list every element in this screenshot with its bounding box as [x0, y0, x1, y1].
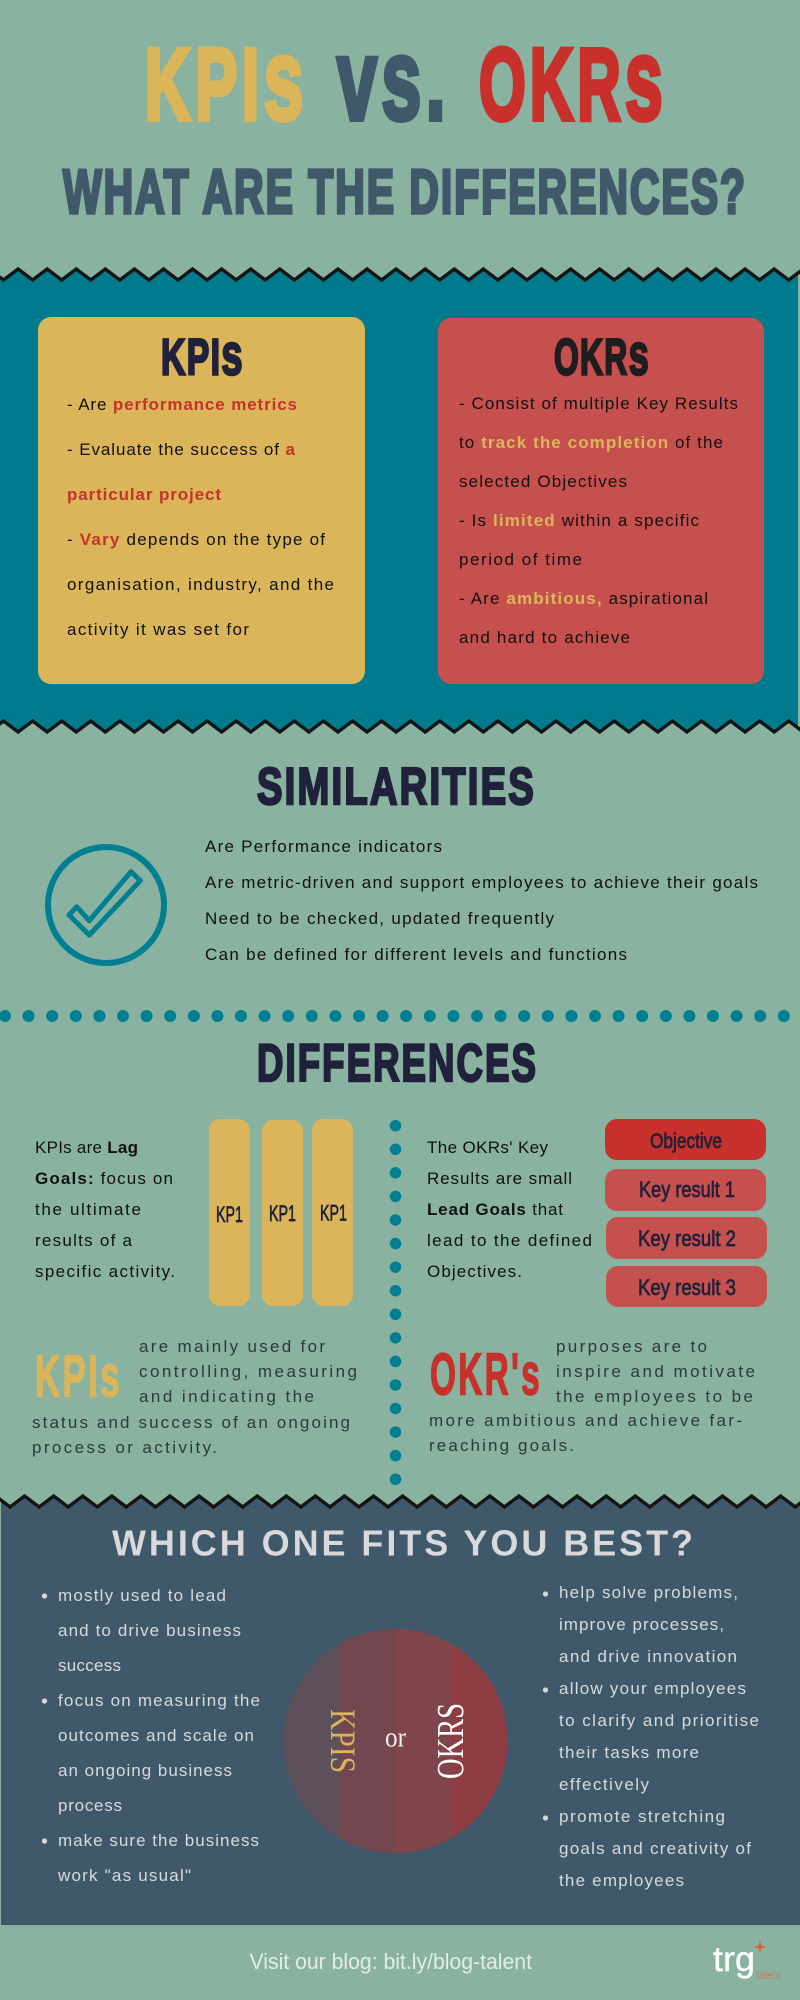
KPIs purpose text: controlling, measuring	[139, 1362, 357, 1381]
KPIs lag goals text: Goals: focus on	[35, 1169, 173, 1188]
OKRs purpose text: more ambitious and achieve far-	[429, 1411, 742, 1430]
OKRs purpose text: the employees to be	[556, 1387, 753, 1406]
OKRs uses list: promote stretching	[559, 1807, 725, 1826]
KPIs characteristics text: - Evaluate the success of a	[67, 440, 296, 459]
key result 3 box	[606, 1266, 767, 1307]
OKRs characteristics text	[459, 394, 738, 647]
KPIs lag goals text	[35, 1138, 175, 1281]
OKRs uses list: effectively	[559, 1775, 650, 1794]
panel: KPIs lag goals	[35, 1119, 353, 1306]
KPIs purpose text: and indicating the	[139, 1387, 314, 1406]
KPIs uses list: focus on measuring the	[58, 1691, 260, 1710]
KPIs characteristics text: particular project	[67, 485, 221, 504]
panel: which one fits you best	[0, 1496, 800, 1925]
panel: KPIs purpose	[32, 1337, 357, 1457]
similarities list: Need to be checked, updated frequently	[205, 909, 554, 928]
objective box: Objective	[650, 1130, 722, 1153]
OKRs lead goals text: Lead Goals that	[427, 1200, 563, 1219]
key result 1 box	[605, 1169, 766, 1211]
KPIs uses list	[42, 1586, 260, 1885]
OKRs purpose text: reaching goals.	[429, 1436, 574, 1455]
heading: KPIs: KPIs	[161, 322, 244, 388]
OKRs uses list: allow your employees	[559, 1679, 746, 1698]
title	[145, 14, 667, 144]
circle: KPIs or OKRs: OKRS	[430, 1703, 472, 1779]
KPIs uses list: and to drive business	[58, 1621, 241, 1640]
key result 1 box: Key result 1	[639, 1177, 735, 1202]
KPI bar 3: KP1	[320, 1200, 347, 1226]
heading: OKRs: OKRs	[554, 322, 650, 388]
KPIs characteristics text	[67, 395, 334, 639]
KPIs lag goals text: the ultimate	[35, 1200, 141, 1219]
panel: OKRs card	[438, 318, 764, 684]
OKRs uses list: to clarify and prioritise	[559, 1711, 759, 1730]
key result 2 box: Key result 2	[638, 1226, 736, 1251]
OKRs uses list: and drive innovation	[559, 1647, 737, 1666]
circle: KPIs or OKRs: KPIS	[323, 1709, 363, 1773]
OKRs uses list: their tasks more	[559, 1743, 699, 1762]
OKRs lead goals text: The OKRs' Key	[427, 1138, 548, 1157]
KPIs uses list: work "as usual"	[57, 1866, 191, 1885]
panel: OKRs purpose	[429, 1337, 755, 1455]
KPIs purpose text: are mainly used for	[139, 1337, 325, 1356]
objective box	[605, 1119, 766, 1160]
KPIs uses list: success	[58, 1656, 121, 1675]
key result 3 box: Key result 3	[638, 1275, 736, 1300]
OKRs characteristics text: and hard to achieve	[459, 628, 630, 647]
KPIs lag goals text: results of a	[35, 1231, 133, 1250]
OKRs lead goals text: lead to the defined	[427, 1231, 592, 1250]
heading: differences: DIFFERENCES	[257, 1034, 538, 1093]
similarities list	[205, 837, 758, 964]
KPIs purpose text: status and success of an ongoing	[32, 1413, 350, 1432]
KPIs uses list: an ongoing business	[58, 1761, 232, 1780]
OKRs characteristics text: period of time	[459, 550, 582, 569]
KPIs label: KPIs	[35, 1344, 122, 1410]
OKRs lead goals text	[427, 1138, 592, 1281]
KPIs uses list: mostly used to lead	[58, 1586, 226, 1605]
footer: blog link: Visit our blog: bit.ly/blog-talent	[250, 1949, 532, 1974]
logo: trg talent	[713, 1940, 782, 1982]
OKR's label: OKR's	[430, 1342, 542, 1408]
icon: check mark in circle	[48, 847, 164, 963]
similarities list: Are metric-driven and support employees to achieve their goals	[205, 873, 758, 892]
KPI bar 1: KP1	[216, 1202, 243, 1227]
KPIs uses list: make sure the business	[58, 1831, 259, 1850]
similarities list: Are Performance indicators	[205, 837, 442, 856]
KPIs characteristics text: activity it was set for	[67, 620, 249, 639]
OKRs uses list: the employees	[559, 1871, 684, 1890]
panel: OKRs lead goals	[427, 1119, 767, 1307]
KPIs lag goals text: specific activity.	[35, 1262, 175, 1281]
OKRs uses list	[543, 1583, 759, 1890]
title: KPIs	[145, 14, 308, 144]
KPIs uses list: process	[58, 1796, 122, 1815]
KPI bar 1	[209, 1119, 250, 1306]
key result 2 box	[606, 1217, 767, 1259]
OKRs characteristics text: - Are ambitious, aspirational	[459, 589, 708, 608]
OKRs characteristics text: - Is limited within a specific	[459, 511, 700, 530]
OKRs purpose text	[429, 1337, 755, 1455]
logo: trg talent: trg	[713, 1940, 755, 1979]
KPI bar 2	[262, 1120, 303, 1306]
OKRs characteristics text: to track the completion of the	[459, 433, 723, 452]
heading: similarities: SIMILARITIES	[257, 758, 536, 816]
circle: KPIs or OKRs	[283, 1629, 509, 1853]
OKRs characteristics text: selected Objectives	[459, 472, 627, 491]
OKRs purpose text: purposes are to	[556, 1337, 707, 1356]
OKRs uses list: improve processes,	[559, 1615, 724, 1634]
KPIs characteristics text: - Are performance metrics	[67, 395, 297, 414]
OKRs lead goals text: Results are small	[427, 1169, 572, 1188]
KPIs purpose text: process or activity.	[32, 1438, 217, 1457]
KPIs characteristics text: organisation, industry, and the	[67, 575, 334, 594]
panel: KPIs card	[38, 317, 365, 684]
circle: KPIs or OKRs: or	[385, 1722, 406, 1754]
OKRs uses list: goals and creativity of	[559, 1839, 751, 1858]
title: vs.	[337, 14, 450, 144]
title: OKRs	[479, 14, 667, 144]
OKRs uses list: help solve problems,	[559, 1583, 738, 1602]
KPI bar 3	[312, 1119, 353, 1306]
KPIs purpose text	[32, 1337, 357, 1457]
OKRs characteristics text: - Consist of multiple Key Results	[459, 394, 738, 413]
OKRs lead goals text: Objectives.	[427, 1262, 522, 1281]
heading: which one fits you best: WHICH ONE FITS YOU BEST?	[112, 1522, 693, 1564]
KPIs characteristics text: - Vary depends on the type of	[67, 530, 325, 549]
similarities list: Can be defined for different levels and functions	[205, 945, 627, 964]
panel: teal comparison band	[0, 269, 800, 732]
OKRs purpose text: inspire and motivate	[556, 1362, 755, 1381]
logo: trg talent: talent	[757, 1970, 782, 1982]
KPIs lag goals text: KPIs are Lag	[35, 1138, 138, 1157]
KPI bar 2: KP1	[269, 1201, 296, 1226]
KPIs uses list: outcomes and scale on	[58, 1726, 254, 1745]
